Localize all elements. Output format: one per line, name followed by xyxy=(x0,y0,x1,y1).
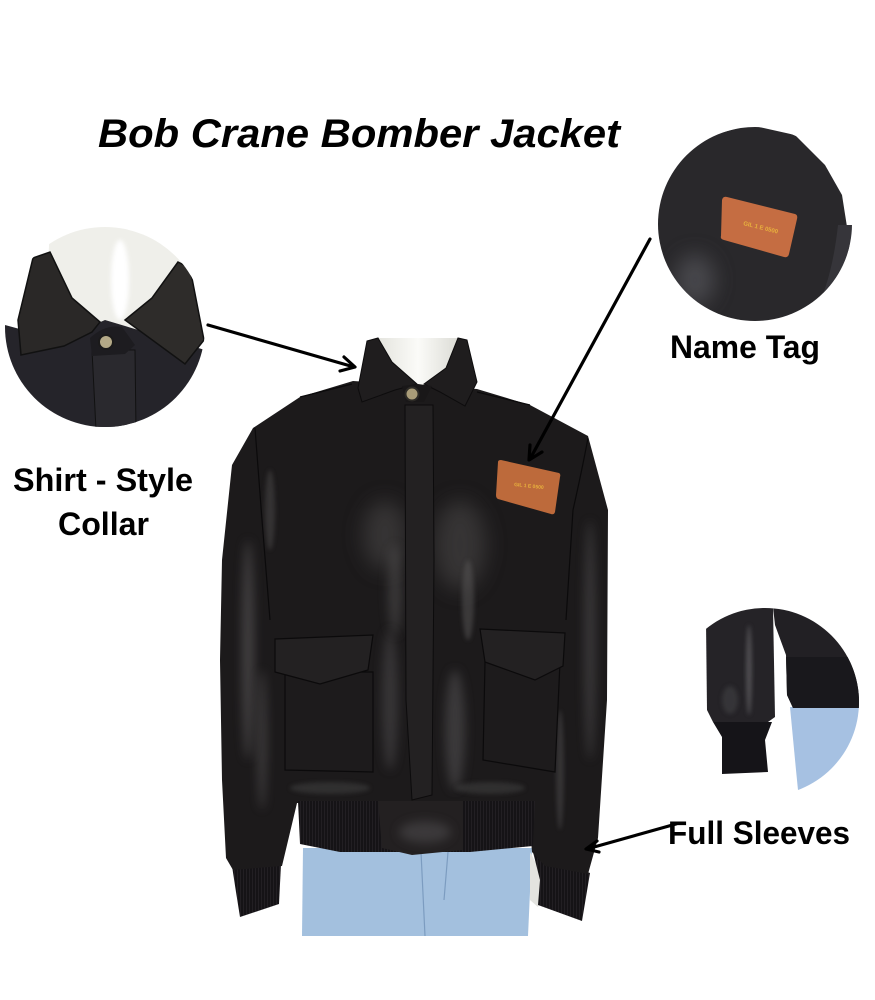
arrow: name tag xyxy=(529,239,650,460)
body xyxy=(773,607,860,708)
right cuff xyxy=(533,852,590,921)
right collar leaf xyxy=(125,262,204,364)
left collar leaf xyxy=(18,252,100,355)
left pocket xyxy=(275,635,373,772)
label: shirt-style collar: Shirt - Style xyxy=(13,462,193,498)
label: shirt-style collar: Collar xyxy=(58,506,149,542)
tag xyxy=(721,197,797,257)
title: Bob Crane Bomber Jacket xyxy=(98,112,622,156)
snap button xyxy=(100,336,112,348)
detail circle: collar xyxy=(0,225,210,430)
name tag patch xyxy=(496,460,560,514)
shoulder seams xyxy=(255,384,588,620)
waist tab highlight xyxy=(399,821,451,843)
name tag patch: GIL 1 E 0500 xyxy=(514,482,544,491)
mannequin neck xyxy=(48,227,182,330)
right pocket xyxy=(480,629,565,772)
jacket front xyxy=(5,320,205,430)
label: name tag: Name Tag xyxy=(670,329,820,365)
jeans patch xyxy=(790,707,859,790)
mannequin hand xyxy=(530,852,545,907)
placket top xyxy=(90,326,135,356)
front waist tab xyxy=(378,801,463,855)
infographic canvas xyxy=(5,118,859,936)
detail circle: name tag: GIL 1 E 0500 xyxy=(743,221,779,236)
placket xyxy=(92,350,136,430)
sleeve xyxy=(706,607,775,722)
detail circle: name tag xyxy=(658,127,852,321)
placket xyxy=(405,405,434,800)
jeans xyxy=(302,848,532,936)
mannequin neck xyxy=(378,338,458,388)
shirt-style collar xyxy=(358,338,477,406)
body rib xyxy=(786,657,860,708)
detail circle: full sleeves xyxy=(706,608,859,790)
snap button xyxy=(406,388,418,400)
arrow: collar xyxy=(208,325,355,371)
jacket photo xyxy=(220,338,608,936)
sleeve and chest highlights xyxy=(242,470,596,830)
hem ribbing xyxy=(298,801,535,852)
label: shirt-style collar xyxy=(13,462,193,542)
left cuff xyxy=(232,864,281,917)
label: full sleeves: Full Sleeves xyxy=(668,815,850,851)
arrow: full sleeves xyxy=(586,824,676,852)
cuff xyxy=(713,722,772,774)
jacket body and sleeves xyxy=(220,381,608,874)
